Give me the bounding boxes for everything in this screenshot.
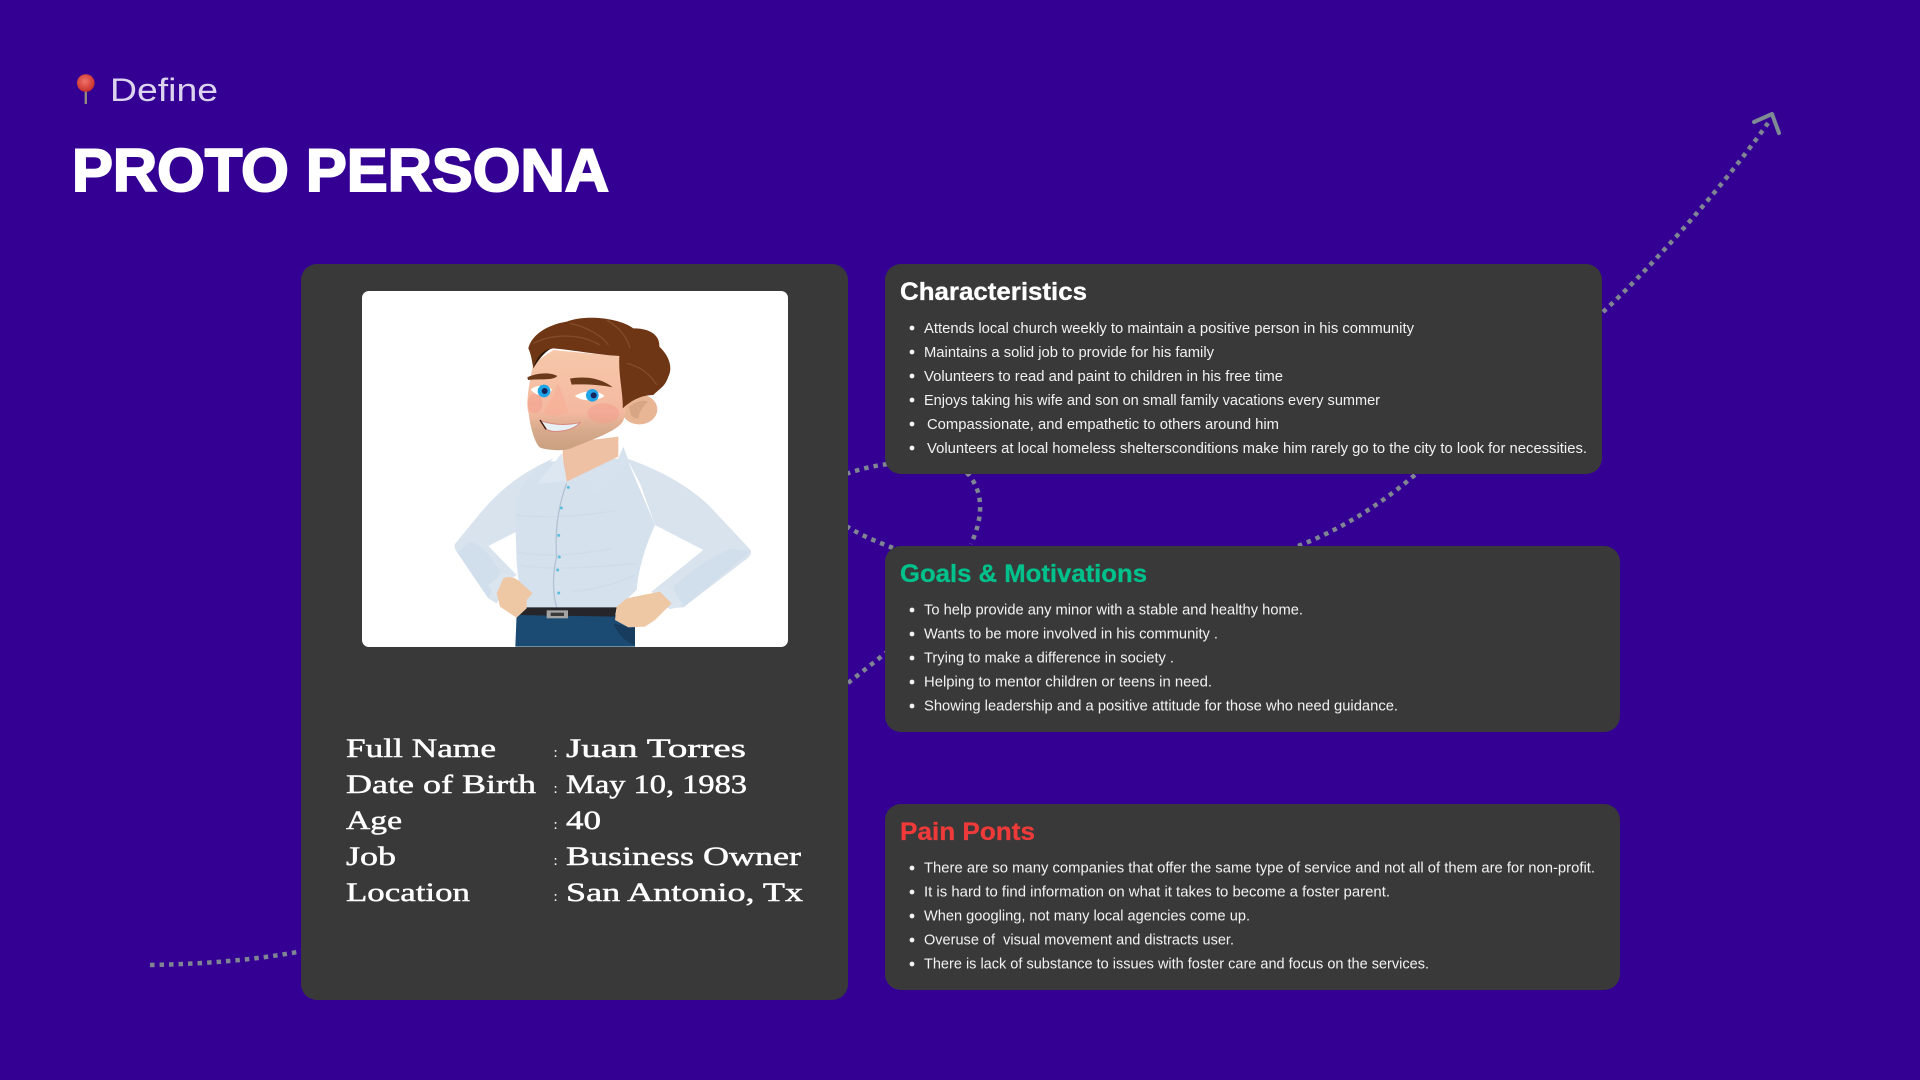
row: date of birth bbox=[346, 770, 747, 799]
section label: Define: Define bbox=[110, 72, 218, 108]
dotted path: goals card to characteristics card bbox=[1298, 474, 1416, 546]
list: characteristics: Volunteers at local homeless sheltersconditions make him rarely go to the city to look for necessities. bbox=[927, 441, 1587, 457]
list: goals: To help provide any minor with a stable and healthy home. bbox=[924, 602, 1303, 618]
heading: pain points: Pain Ponts bbox=[900, 818, 1035, 846]
row: location: San Antonio, Tx bbox=[566, 878, 803, 907]
panel: persona card bbox=[301, 264, 848, 1000]
panel: characteristics bbox=[885, 264, 1602, 474]
row: job: : bbox=[554, 853, 558, 869]
list: characteristics: Enjoys taking his wife and son on small family vacations every summer bbox=[924, 393, 1380, 409]
row: date of birth: : bbox=[554, 781, 558, 797]
list: characteristics bbox=[910, 321, 1587, 457]
row: location: Location bbox=[346, 878, 470, 907]
list: goals: Trying to make a difference in society . bbox=[924, 650, 1174, 666]
list: goals: Showing leadership and a positive attitude for those who need guidance. bbox=[924, 698, 1398, 714]
panel: pain points bbox=[885, 804, 1620, 990]
dotted arrow: rising path to top right bbox=[1603, 114, 1779, 312]
row: full name: : bbox=[554, 745, 558, 761]
list: characteristics: Maintains a solid job to provide for his family bbox=[924, 345, 1215, 361]
row: age: 40 bbox=[566, 806, 601, 835]
row: location bbox=[346, 878, 803, 907]
dotted path: persona card to goals card bbox=[846, 526, 893, 548]
illustration: smiling man in shirt bbox=[455, 318, 751, 647]
heading: goals and motivations: Goals & Motivations bbox=[900, 560, 1147, 588]
row: date of birth: Date of Birth bbox=[346, 770, 536, 799]
list: pain points bbox=[910, 860, 1595, 972]
dotted path: persona card to goals card lower bbox=[848, 652, 887, 683]
row: date of birth: May 10, 1983 bbox=[566, 770, 747, 799]
list: characteristics: Compassionate, and empathetic to others around him bbox=[927, 417, 1279, 433]
row: job bbox=[346, 842, 801, 871]
dotted path: loop between persona card and cards bbox=[846, 462, 980, 544]
panel: goals and motivations bbox=[885, 546, 1620, 732]
list: pain points: There is lack of substance to issues with foster care and focus on the services. bbox=[924, 956, 1429, 972]
list: pain points: When googling, not many local agencies come up. bbox=[924, 908, 1250, 924]
list: pain points: There are so many companies that offer the same type of service and not all of them are for non-profit. bbox=[924, 860, 1595, 876]
icon: round pushpin bbox=[77, 74, 95, 104]
row: job: Job bbox=[346, 842, 396, 871]
list: characteristics: Volunteers to read and paint to children in his free time bbox=[924, 369, 1283, 385]
list: pain points: Overuse of visual movement and distracts user. bbox=[924, 932, 1234, 948]
persona details bbox=[346, 734, 803, 907]
row: age: Age bbox=[346, 806, 402, 835]
row: location: : bbox=[554, 889, 558, 905]
list: pain points: It is hard to find information on what it takes to become a foster parent. bbox=[924, 884, 1390, 900]
row: job: Business Owner bbox=[566, 842, 801, 871]
title: PROTO PERSONA bbox=[72, 137, 609, 204]
list: characteristics: Attends local church weekly to maintain a positive person in his community bbox=[924, 321, 1415, 337]
portrait photo bbox=[362, 291, 788, 647]
row: age: : bbox=[554, 817, 558, 833]
list: goals: Wants to be more involved in his community . bbox=[924, 626, 1218, 642]
row: full name: Juan Torres bbox=[566, 734, 746, 763]
row: full name: Full Name bbox=[346, 734, 496, 763]
row: full name bbox=[346, 734, 746, 763]
dotted path: lower left to persona card bbox=[150, 951, 303, 965]
heading: characteristics: Characteristics bbox=[900, 278, 1087, 306]
list: goals: Helping to mentor children or teens in need. bbox=[924, 674, 1212, 690]
row: age bbox=[346, 806, 601, 835]
list: goals bbox=[910, 602, 1398, 714]
